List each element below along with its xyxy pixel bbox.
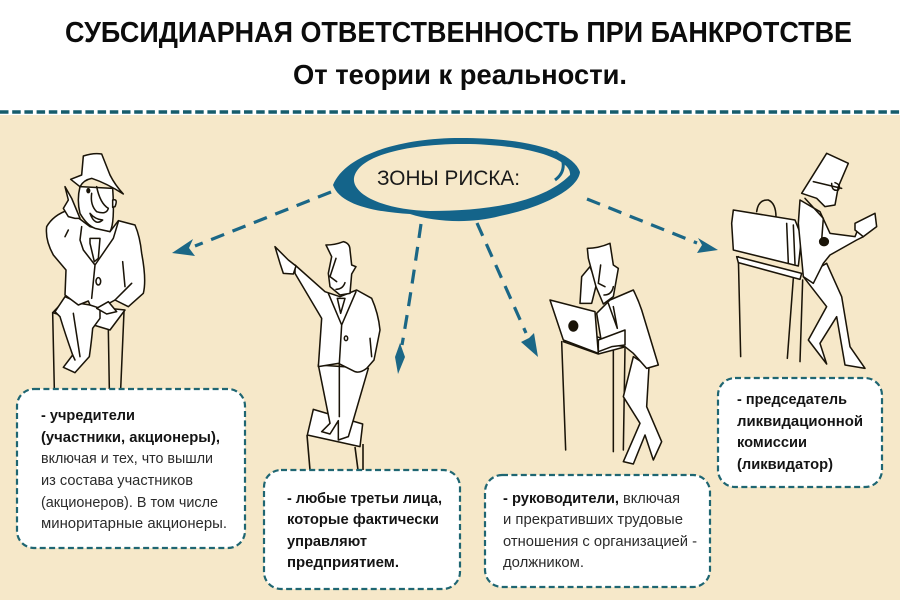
- text: managers: отношения с организацией -: [503, 534, 697, 550]
- text: founders: миноритарные акционеры.: [41, 516, 227, 532]
- text: founders: - учредители: [41, 408, 135, 424]
- panel: third parties: [264, 470, 460, 589]
- arrow: to founders: [172, 192, 331, 256]
- text: founders: (участники, акционеры),: [41, 430, 220, 446]
- text: liquidator: [737, 392, 863, 473]
- text: managers: должником.: [503, 555, 584, 571]
- arrow: to liquidator: [587, 199, 718, 253]
- panel: founders: [17, 389, 245, 548]
- text: managers: - руководители,: [503, 491, 619, 507]
- text: liquidator: ликвидационной: [737, 414, 863, 430]
- text: founders: (акционеров). В том числе: [41, 495, 218, 511]
- figure: man with book and briefcase: [732, 153, 877, 368]
- panel: liquidator: [718, 378, 882, 487]
- title: СУБСИДИАРНАЯ ОТВЕТСТВЕННОСТЬ ПРИ БАНКРОТСТВЕ: [65, 17, 852, 49]
- inner swoosh: [343, 173, 372, 206]
- figure: man with phone on stool: [46, 154, 145, 389]
- risk zones oval: [333, 138, 580, 221]
- header divider: [0, 110, 900, 114]
- text: liquidator: (ликвидатор): [737, 457, 833, 473]
- text: founders: из состава участников: [41, 473, 193, 489]
- arrow: to third parties: [395, 224, 421, 374]
- text: managers: [503, 491, 697, 571]
- text: managers: и прекративших трудовые: [503, 512, 683, 528]
- panel: managers: [485, 475, 710, 587]
- text: founders: [41, 408, 227, 532]
- arrow: to managers: [477, 223, 538, 357]
- text: liquidator: комиссии: [737, 435, 807, 451]
- text: managers: включая: [623, 491, 680, 507]
- stand legs: pointing man: [307, 435, 363, 470]
- oval swoosh: [333, 138, 580, 221]
- figure: man with laptop at lectern: [550, 243, 803, 464]
- subtitle: От теории к реальности.: [293, 59, 627, 90]
- text: founders: включая и тех, что вышли: [41, 451, 213, 467]
- text: third parties: [287, 491, 442, 571]
- text: third parties: предприятием.: [287, 555, 399, 571]
- text: third parties: которые фактически: [287, 512, 439, 528]
- figure: pointing man on stand: [275, 242, 380, 447]
- text: third parties: управляют: [287, 534, 367, 550]
- text: liquidator: - председатель: [737, 392, 847, 408]
- oval label: ЗОНЫ РИСКА:: [377, 167, 520, 190]
- text: third parties: - любые третьи лица,: [287, 491, 442, 507]
